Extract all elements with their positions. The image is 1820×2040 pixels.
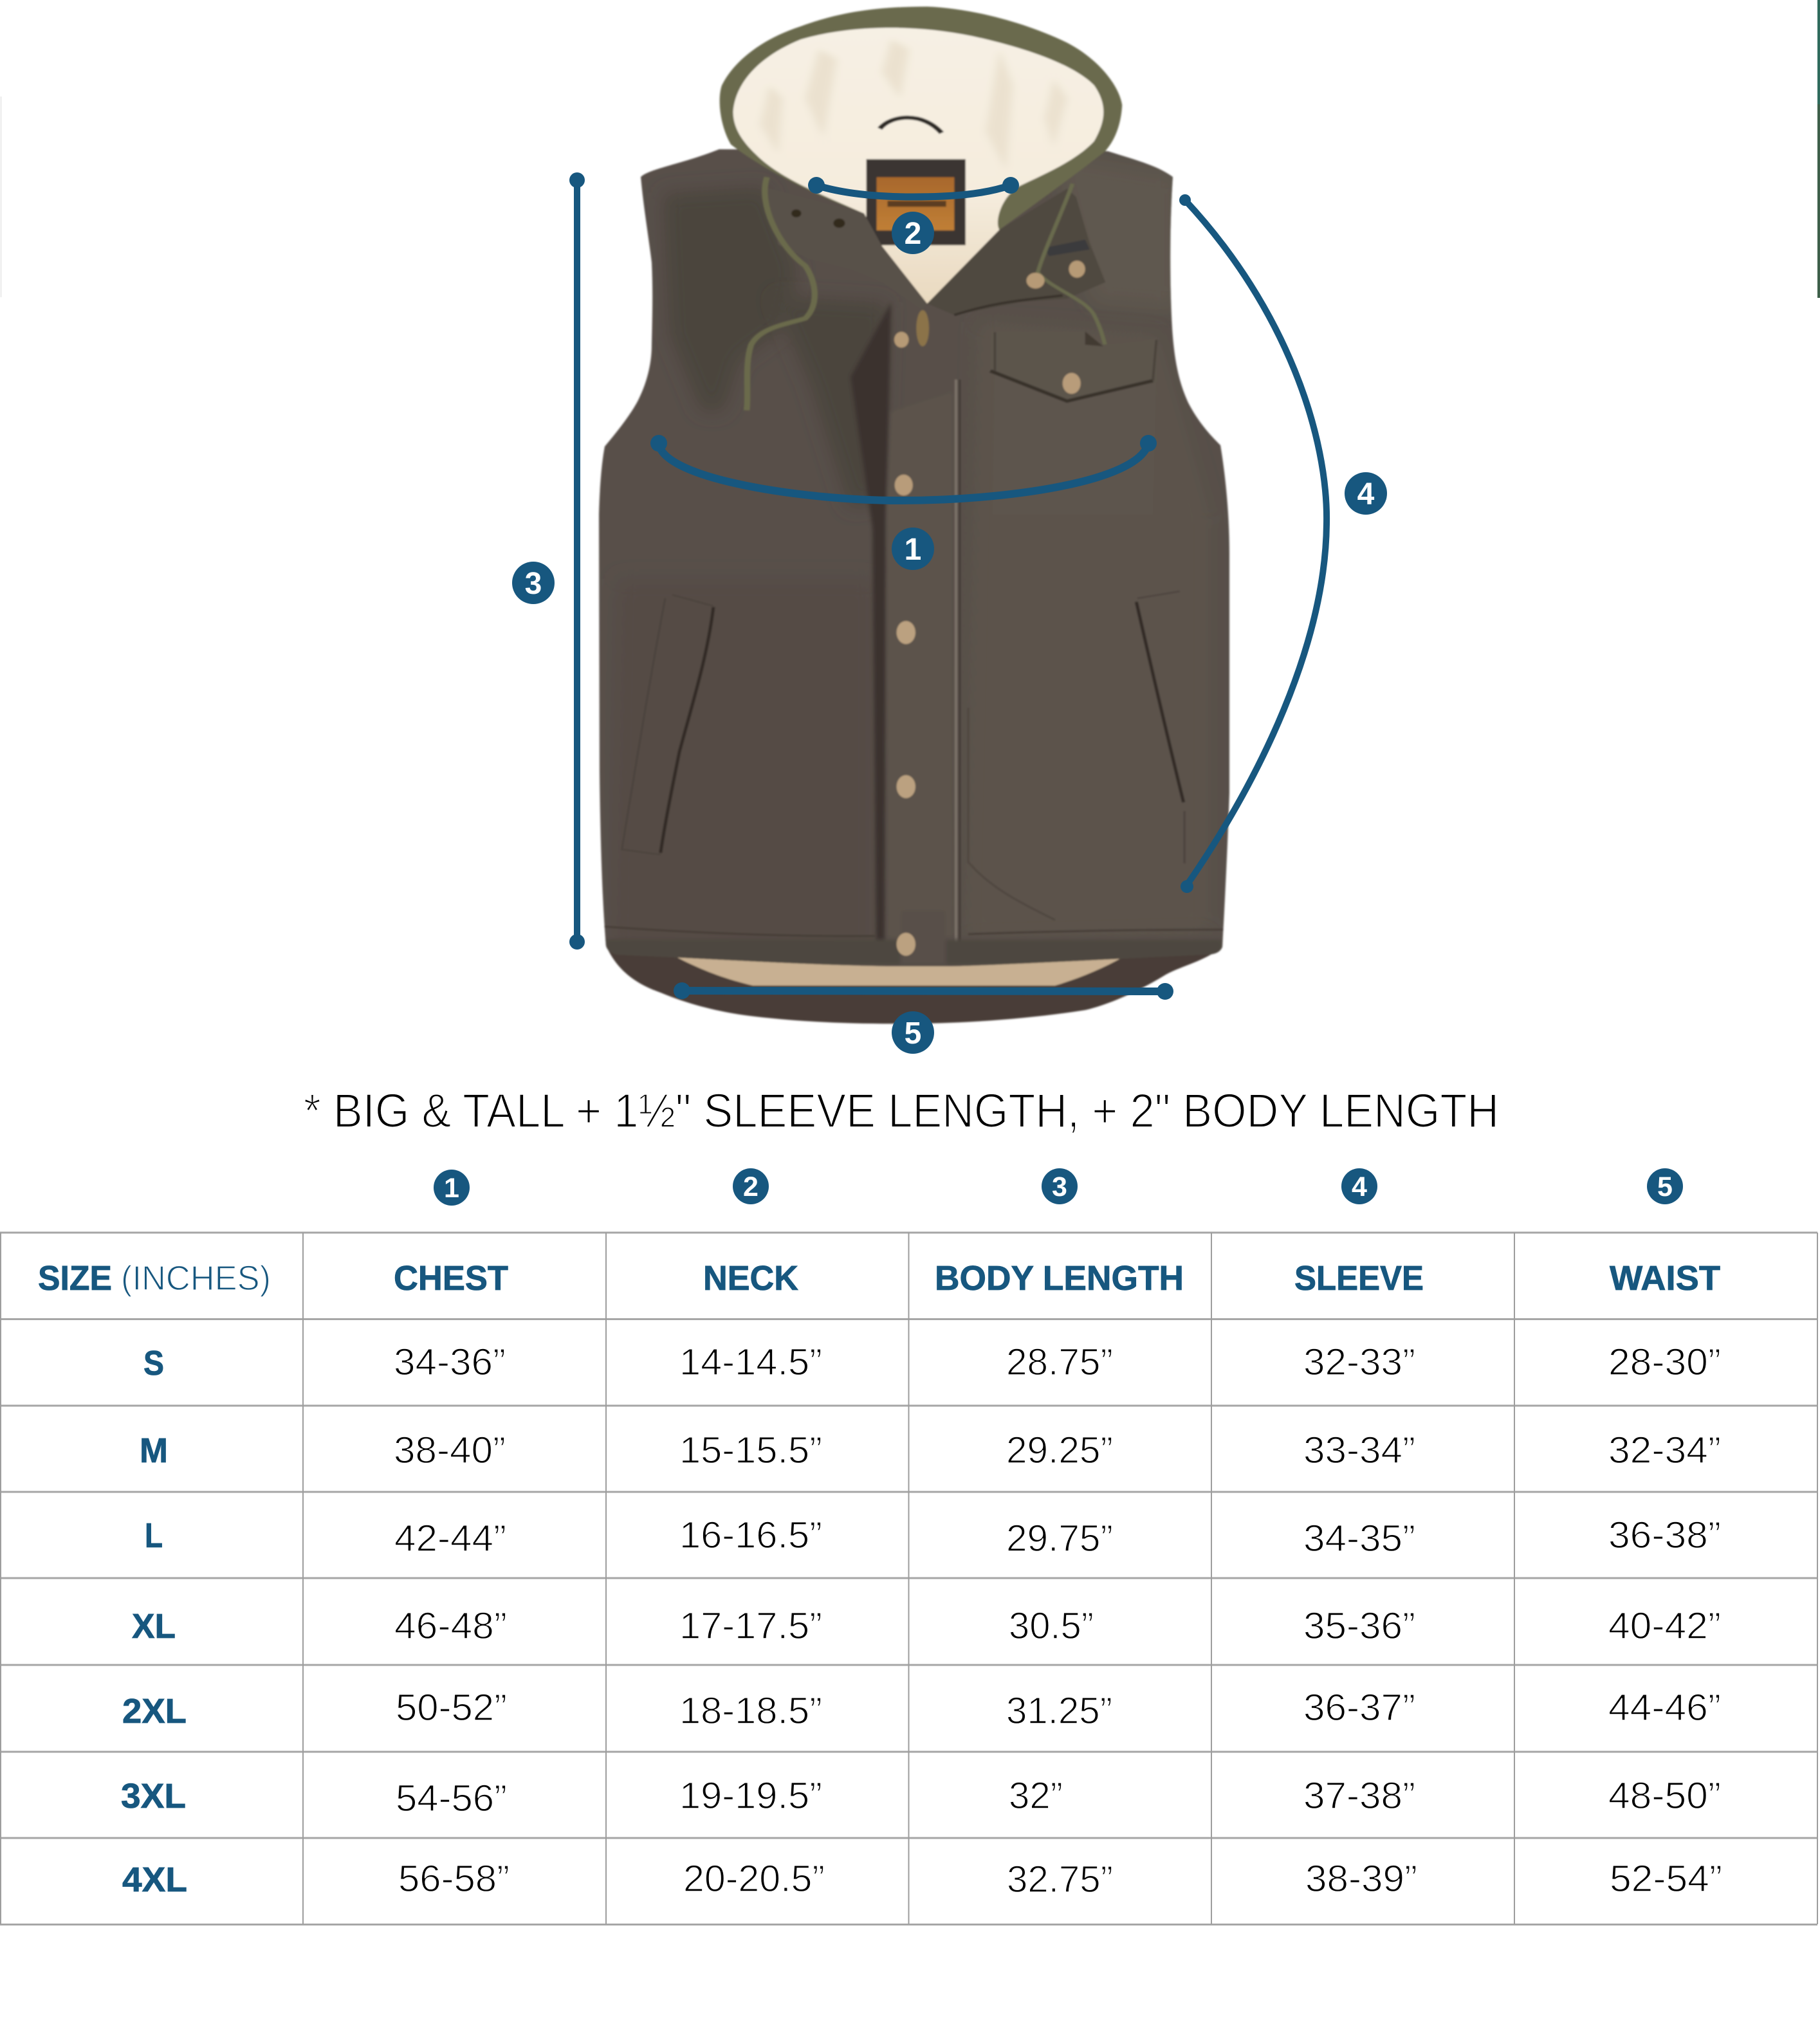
row 3XL: 37-38”	[1303, 1775, 1415, 1817]
measure 3: body length line	[569, 172, 585, 950]
row 4XL: 52-54”	[1610, 1858, 1722, 1900]
right drawstring	[1038, 184, 1105, 346]
hood and lining	[720, 6, 1122, 304]
column badge 1	[434, 1170, 470, 1206]
sherpa hem	[677, 957, 1123, 986]
placket	[886, 480, 889, 585]
faint left edge mark	[0, 96, 2, 297]
badge 4 on vest	[1345, 472, 1387, 515]
collar seam	[954, 295, 1063, 315]
badge 3 on vest	[512, 562, 555, 604]
left pocket	[622, 595, 713, 854]
badge 1 on vest	[892, 528, 934, 570]
row L: 42-44”	[394, 1518, 506, 1559]
row S	[143, 1341, 1721, 1383]
row 4XL: 20-20.5”	[683, 1858, 825, 1900]
badge 5 on vest: 5	[905, 1016, 921, 1051]
column badge 4: 4	[1352, 1172, 1367, 1202]
badge 2 on vest: 2	[905, 217, 921, 251]
row 2XL: 18-18.5”	[679, 1690, 822, 1732]
column badge 3: 3	[1052, 1172, 1067, 1202]
table header row	[38, 1259, 1720, 1298]
right pocket	[1136, 591, 1184, 863]
zipper shadow	[1045, 239, 1090, 256]
row L	[145, 1514, 1721, 1559]
left collar flap	[765, 187, 927, 310]
row 2XL	[122, 1687, 1721, 1732]
lower buttons	[897, 621, 915, 956]
row M: M	[140, 1431, 168, 1470]
sherpa lining	[733, 28, 1103, 304]
measure 2: neck curve	[808, 177, 1019, 197]
row S: 34-36”	[394, 1341, 506, 1383]
row M: 38-40”	[394, 1429, 506, 1471]
row L: 16-16.5”	[679, 1514, 822, 1556]
row M: 15-15.5”	[679, 1429, 822, 1471]
neck label	[866, 159, 966, 245]
badge 3 on vest: 3	[525, 567, 542, 601]
column badge 4	[1341, 1168, 1377, 1204]
waist header: WAIST	[1610, 1259, 1720, 1298]
collar and drawstrings	[747, 178, 1157, 515]
size inches header	[38, 1259, 271, 1298]
row L: L	[145, 1516, 163, 1555]
badge 4 on vest: 4	[1357, 477, 1375, 511]
chest pocket	[990, 331, 1157, 515]
row M: 32-34”	[1608, 1429, 1721, 1471]
row 2XL: 44-46”	[1608, 1687, 1721, 1729]
measure 1: chest curve	[650, 435, 1157, 501]
vest illustration	[599, 6, 1229, 1024]
row S: S	[143, 1344, 164, 1383]
row 3XL: 54-56”	[396, 1778, 507, 1819]
hanger loop	[880, 118, 942, 133]
row S: 32-33”	[1303, 1341, 1415, 1383]
row 4XL: 38-39”	[1305, 1858, 1417, 1900]
side pockets and lower buttons	[622, 591, 1184, 956]
row 3XL	[121, 1775, 1721, 1819]
chest header: CHEST	[394, 1259, 508, 1298]
column badge 2: 2	[743, 1172, 758, 1202]
vest front body	[599, 149, 1229, 966]
right collar flap	[927, 188, 1105, 315]
row 3XL: 3XL	[121, 1777, 186, 1815]
row XL: 46-48”	[394, 1605, 507, 1647]
column number badges	[434, 1168, 1683, 1206]
badge 2 on vest	[892, 212, 934, 254]
eyelets and snaps	[791, 210, 1085, 495]
column badge 3	[1042, 1168, 1078, 1204]
hem band	[602, 926, 1226, 936]
row L: 34-35”	[1303, 1518, 1415, 1559]
size inches header: (INCHES)	[121, 1259, 271, 1298]
row 4XL	[122, 1858, 1722, 1900]
column badge 5	[1647, 1168, 1683, 1204]
body length header: BODY LENGTH	[935, 1259, 1184, 1298]
row L: 29.75”	[1006, 1518, 1113, 1559]
row S: 28-30”	[1608, 1341, 1721, 1383]
row XL: 35-36”	[1303, 1605, 1415, 1647]
left drawstring	[747, 178, 814, 410]
row 3XL: 19-19.5”	[679, 1775, 822, 1817]
row XL: XL	[132, 1607, 176, 1646]
sherpa folds	[760, 39, 1067, 170]
row 4XL: 56-58”	[398, 1858, 510, 1900]
badge 1 on vest: 1	[905, 533, 921, 567]
row XL	[132, 1605, 1721, 1647]
row 4XL: 32.75”	[1007, 1859, 1113, 1900]
row XL: 30.5”	[1009, 1605, 1094, 1647]
row M: 33-34”	[1303, 1429, 1415, 1471]
sleeve header: SLEEVE	[1294, 1259, 1424, 1298]
row M: 29.25”	[1006, 1429, 1113, 1471]
row 2XL: 36-37”	[1303, 1687, 1415, 1729]
vest back panel	[606, 946, 1222, 1024]
row S: 28.75”	[1006, 1341, 1113, 1383]
column badge 2	[733, 1168, 769, 1204]
row M	[140, 1429, 1721, 1471]
hood outer olive	[720, 6, 1122, 230]
row 4XL: 4XL	[122, 1861, 187, 1899]
size table grid	[0, 1233, 1817, 1925]
measure 4: sleeve curve	[1179, 194, 1327, 893]
column badge 5: 5	[1657, 1172, 1673, 1202]
row XL: 17-17.5”	[679, 1605, 822, 1647]
row 3XL: 32”	[1009, 1775, 1063, 1817]
row L: 36-38”	[1608, 1514, 1721, 1556]
lower panel seams	[968, 708, 1055, 920]
big and tall note: * BIG & TALL + 1½" SLEEVE LENGTH, + 2" BODY LENGTH	[304, 1084, 1499, 1137]
placket dark wedge	[850, 302, 891, 946]
row 3XL: 48-50”	[1608, 1775, 1721, 1817]
row 2XL: 31.25”	[1006, 1690, 1112, 1732]
column badge 1: 1	[444, 1173, 459, 1204]
row S: 14-14.5”	[679, 1341, 822, 1383]
neck header: NECK	[703, 1259, 798, 1298]
row 2XL: 2XL	[122, 1692, 187, 1731]
row XL: 40-42”	[1608, 1605, 1721, 1647]
size inches header: SIZE	[38, 1259, 112, 1298]
badge 5 on vest	[892, 1011, 934, 1054]
row 2XL: 50-52”	[396, 1687, 507, 1729]
vest shading	[602, 154, 1226, 965]
green edge strip	[1817, 0, 1820, 298]
measure 5: waist line	[674, 982, 1173, 1000]
